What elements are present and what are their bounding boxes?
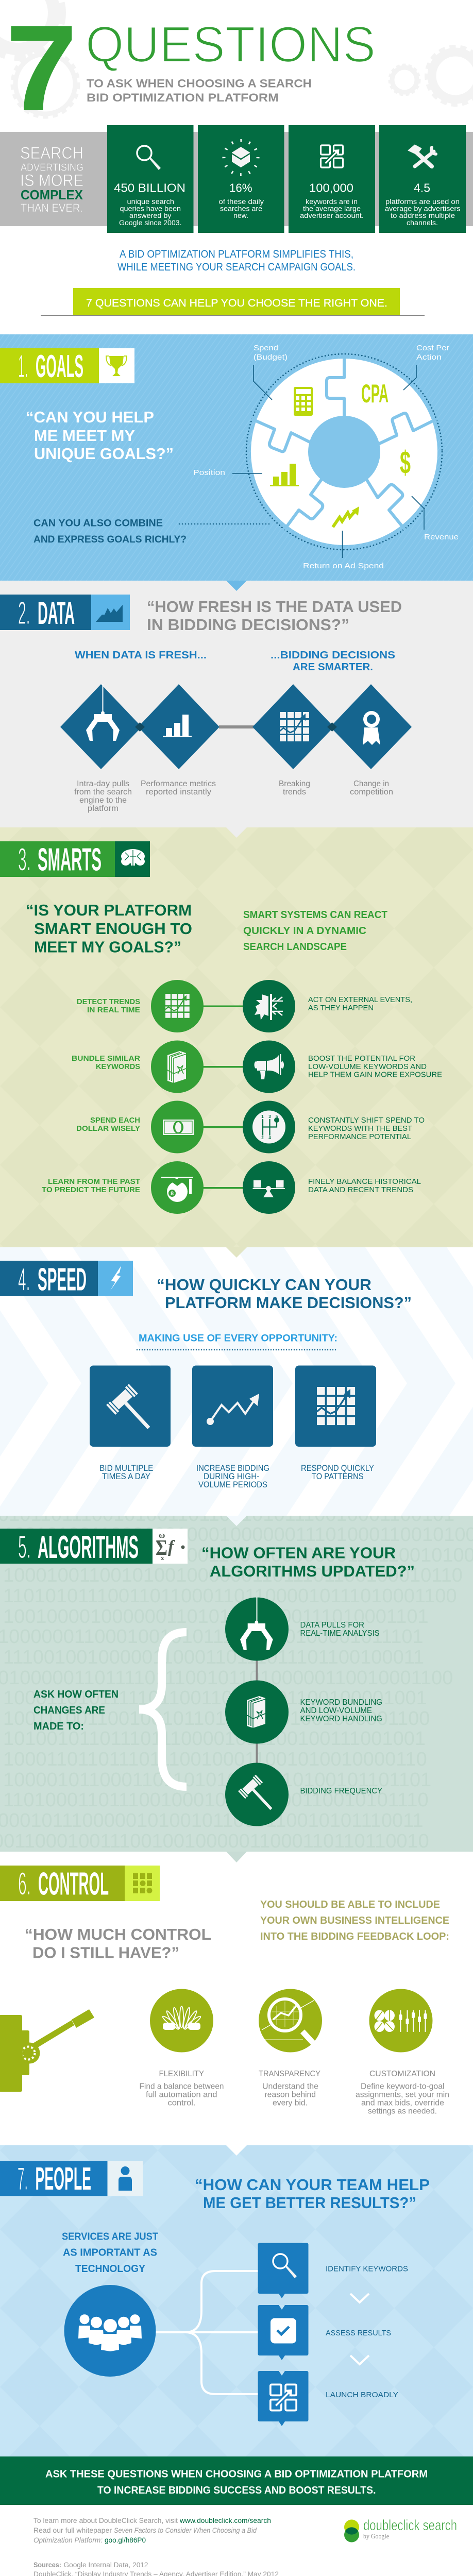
card: bid multiple xyxy=(90,1365,171,1447)
icon: money xyxy=(163,1120,194,1135)
left labels: SPEND EACH xyxy=(90,1116,140,1125)
left labels: DOLLAR WISELY xyxy=(76,1124,140,1133)
title: big numeral 7: 7 xyxy=(6,1,77,135)
icon: megaphone xyxy=(255,1054,284,1079)
captions: Change in xyxy=(353,779,389,788)
brace xyxy=(139,1632,187,1787)
heading: 5 algorithms: 5. xyxy=(18,1530,31,1565)
descriptions: reason behind xyxy=(265,2091,316,2099)
binary background: 1010010110111011100001011100100111001001 xyxy=(3,1728,426,1750)
text block: services xyxy=(62,2231,158,2275)
icon: gavel xyxy=(106,1384,160,1438)
text block: business intelligence xyxy=(260,1899,449,1942)
question: how can your team xyxy=(195,2176,430,2212)
stat card: 100,000: 100,000 xyxy=(309,181,353,195)
footer: links and sources: To learn more about DoubleClick Search, visit xyxy=(33,2517,178,2524)
footer: links and sources: Seven Factors to Consider When Choosing a Bid xyxy=(114,2527,257,2534)
text block: search advertising is more complex: SEARCH xyxy=(20,144,83,162)
stat card: 4.5: to address multiple xyxy=(391,212,455,219)
labels: Revenue xyxy=(424,533,459,541)
icon: gear shift: 1 xyxy=(261,1114,264,1119)
labels: LAUNCH BROADLY xyxy=(326,2391,398,2399)
text block: ask how often: ASK HOW OFTEN xyxy=(33,1689,119,1700)
binary background: 10010100110001001000100000011101000110010100 xyxy=(3,1524,473,1546)
chevrons xyxy=(350,2294,369,2364)
stat card: 4.5 xyxy=(379,125,466,233)
labels: Cost Per xyxy=(416,344,449,352)
binary background: 1000110101111101100110100101100100001001 xyxy=(3,1687,427,1709)
labels: KEYWORD HANDLING xyxy=(300,1715,382,1723)
labels: FLEXIBILITY xyxy=(159,2070,204,2078)
panel: 6 control xyxy=(0,1852,473,2145)
question: how fresh: “HOW FRESH IS THE DATA USED xyxy=(147,598,402,616)
icon: sigma formula: x xyxy=(161,1554,164,1562)
text block: smart systems: QUICKLY IN A DYNAMIC xyxy=(243,925,366,937)
icon: area chart xyxy=(96,605,123,622)
left labels: KEYWORDS xyxy=(96,1062,140,1071)
banner: 7 questions can help: 7 QUESTIONS CAN HELP YOU CHOOSE THE RIGHT ONE. xyxy=(86,297,387,309)
icon: magnifier xyxy=(137,146,161,170)
connectors xyxy=(256,1659,258,1764)
binary background: 01101001000100001001100110000000110110010100 xyxy=(3,1545,473,1566)
icon: slinky xyxy=(162,2006,201,2030)
text block: combine goals: AND EXPRESS GOALS RICHLY? xyxy=(33,534,187,545)
captions: DURING HIGH- xyxy=(204,1472,260,1481)
descriptions xyxy=(139,2082,449,2115)
binary background: 1001110011001001011010011001001000001100 xyxy=(3,1708,430,1730)
circle: keyword bundling xyxy=(225,1681,289,1743)
stat card: 16%: searches are xyxy=(220,205,262,212)
icon: rising arrow xyxy=(207,1394,259,1425)
icon: bundle xyxy=(166,1051,186,1083)
text block: smart systems: SMART SYSTEMS CAN REACT xyxy=(243,909,387,921)
connector xyxy=(219,725,255,728)
step: launch broadly xyxy=(258,2371,308,2426)
circle: customization xyxy=(369,1989,433,2053)
heading: 2 data: 2. xyxy=(18,596,30,631)
stat card: 450 billion: queries have been xyxy=(120,205,181,212)
connector lines xyxy=(155,2271,258,2394)
logo: doubleclick search: by Google xyxy=(363,2532,389,2540)
subtitle xyxy=(87,77,312,104)
right labels xyxy=(308,995,442,1194)
icon: gear shift xyxy=(252,1111,285,1144)
binary background: 0101101110010100110110010101110010001100101 xyxy=(0,1504,454,1526)
stat card: 16% xyxy=(198,125,284,233)
card: increase bidding xyxy=(192,1365,273,1447)
subtitle: TO ASK WHEN CHOOSING A SEARCH xyxy=(87,77,312,90)
binary background: 1110010010000011000110111011101100100011 xyxy=(3,1647,424,1668)
captions xyxy=(99,1464,374,1489)
binary background: 0001011100000101001011000110010101110011 xyxy=(0,1810,424,1832)
stat card: 450 billion: 450 BILLION xyxy=(114,181,185,195)
text block: search advertising is more complex: THAN EVER. xyxy=(21,201,83,214)
circle: flexibility xyxy=(150,1989,213,2053)
icon: gear shift: 3 xyxy=(268,1114,271,1119)
icon: cube xyxy=(224,141,258,175)
labels: TRANSPARENCY xyxy=(259,2070,320,2078)
step: assess results xyxy=(258,2305,308,2360)
diamonds xyxy=(60,684,412,769)
leader lines xyxy=(232,365,424,558)
icon: calculator xyxy=(294,387,313,416)
question: is your platform smart: MEET MY GOALS?” xyxy=(34,939,181,956)
descriptions: Define keyword-to-goal xyxy=(361,2082,444,2091)
icon: ribbon xyxy=(363,711,380,745)
labels: Return on Ad Spend xyxy=(303,562,384,570)
captions: platform xyxy=(88,804,119,813)
stat card: 450 billion xyxy=(107,125,194,233)
banner: closing: TO INCREASE BIDDING SUCCESS AND BOOST RESULTS. xyxy=(97,2485,376,2496)
stat card: 100,000: advertiser account. xyxy=(300,212,364,219)
text block: platform simplifies xyxy=(117,248,356,273)
icon: control grid xyxy=(133,1873,153,1893)
left labels xyxy=(42,997,140,1194)
title: QUESTIONS: QUESTIONS xyxy=(86,16,376,73)
question: is your platform smart xyxy=(26,902,192,956)
heading: 6 control: CONTROL xyxy=(38,1866,109,1902)
stat card: 4.5: channels. xyxy=(407,219,438,227)
question: how often xyxy=(201,1545,415,1580)
stat card: 450 billion: Google since 2003. xyxy=(119,219,181,227)
stat card: 16%: new. xyxy=(233,212,248,219)
icon: gear shift: 2 xyxy=(261,1136,264,1140)
heading: 7 people: 7. xyxy=(18,2161,28,2197)
footer: links and sources: www.doubleclick.com/search xyxy=(179,2517,271,2524)
panel: 3 smarts xyxy=(0,827,473,1247)
left labels: IN REAL TIME xyxy=(87,1006,140,1014)
binary background: 1000110110111011100100011001010010000110 xyxy=(3,1749,427,1770)
step: identify keywords xyxy=(258,2243,308,2298)
captions: competition xyxy=(350,788,393,796)
panel: 4 speed xyxy=(0,1247,473,1516)
footer: links and sources xyxy=(33,2517,279,2576)
question: how quickly xyxy=(157,1276,412,1312)
subtitle: BID OPTIMIZATION PLATFORM xyxy=(87,91,279,104)
descriptions: full automation and xyxy=(146,2091,217,2099)
labels xyxy=(326,2265,408,2399)
labels: BIDDING FREQUENCY xyxy=(300,1787,382,1795)
icon: gear shift: 4 xyxy=(268,1136,271,1140)
heading: 4 speed: SPEED xyxy=(38,1262,87,1297)
subheads: ...BIDDING DECISIONS xyxy=(271,650,395,661)
heading: 4 speed: 4. xyxy=(18,1262,30,1297)
question: can you help: ME MEET MY xyxy=(34,427,135,445)
icon: claw xyxy=(86,684,120,741)
text block: business intelligence: INTO THE BIDDING FEEDBACK LOOP: xyxy=(260,1931,449,1942)
icon: bars xyxy=(163,715,192,737)
text block: ask how often: CHANGES ARE xyxy=(33,1705,105,1716)
descriptions: every bid. xyxy=(273,2099,308,2107)
left labels: DETECT TRENDS xyxy=(77,997,140,1006)
labels: IDENTIFY KEYWORDS xyxy=(326,2265,408,2273)
icon: lightning bolt xyxy=(110,1266,121,1291)
binary background: 1101000110111001000101001000110010101110 xyxy=(3,1789,429,1811)
captions: Breaking xyxy=(279,779,310,788)
connectors xyxy=(201,1006,245,1189)
labels: REAL-TIME ANALYSIS xyxy=(300,1629,379,1638)
banner: closing: ASK THESE QUESTIONS WHEN CHOOSING A BID OPTIMIZATION PLATFORM xyxy=(45,2469,428,2480)
icon: sigma formula: ω xyxy=(159,1530,165,1540)
labels: Spend xyxy=(254,344,278,352)
stat card: 450 billion: unique search xyxy=(127,198,174,206)
text block: platform simplifies: A BID OPTIMIZATION PLATFORM SIMPLIFIES THIS, xyxy=(120,248,353,260)
icon: trophy xyxy=(106,356,127,376)
labels xyxy=(159,2070,435,2078)
icon: sigma formula: Σ xyxy=(156,1536,167,1560)
icon: trend grid xyxy=(165,994,190,1018)
labels: AND LOW-VOLUME xyxy=(300,1706,372,1715)
stat card: 16%: of these daily xyxy=(218,198,264,206)
right labels: CONSTANTLY SHIFT SPEND TO xyxy=(308,1116,425,1125)
labels: CUSTOMIZATION xyxy=(369,2070,435,2078)
footer: links and sources: goo.gl/h86P0 xyxy=(105,2536,146,2544)
captions: TIMES A DAY xyxy=(102,1472,150,1481)
descriptions: settings as needed. xyxy=(368,2107,437,2115)
question: how often: ALGORITHMS UPDATED?” xyxy=(210,1563,415,1580)
binary background: 1101010111001101100011011000010111010001100 xyxy=(3,1585,457,1607)
subhead: every opportunity: MAKING USE OF EVERY OPPORTUNITY: xyxy=(139,1333,337,1344)
chart: goal gear wheel xyxy=(179,344,459,570)
question: how can your team: “HOW CAN YOUR TEAM HELP xyxy=(195,2176,430,2194)
subheads: ARE SMARTER. xyxy=(293,662,373,673)
text block: business intelligence: YOU SHOULD BE ABLE TO INCLUDE xyxy=(260,1899,440,1910)
labels: Action xyxy=(416,353,442,362)
icon: gavel xyxy=(238,1775,280,1817)
panel: 7 people xyxy=(0,2145,473,2456)
icon: dollar: $ xyxy=(400,445,411,481)
captions: engine to the xyxy=(79,796,127,805)
captions: VOLUME PERIODS xyxy=(198,1480,267,1489)
question: is your platform smart: SMART ENOUGH TO xyxy=(34,920,192,938)
icon: person xyxy=(119,2166,132,2191)
binary background: 1000010110001101101010000010100101101101 xyxy=(3,1769,431,1791)
panel: 1 goals xyxy=(0,334,473,581)
text block: combine goals xyxy=(33,518,187,545)
icon: sliders and dials xyxy=(374,2010,427,2032)
subheads xyxy=(75,650,395,673)
icon: trend grid xyxy=(317,1387,355,1425)
stat card: 4.5: 4.5 xyxy=(414,181,430,195)
icon: gear shift: 5 xyxy=(276,1114,278,1119)
question: how much control: DO I STILL HAVE?” xyxy=(32,1944,179,1962)
stat card: 16%: 16% xyxy=(229,181,252,195)
text block: platform simplifies: WHILE MEETING YOUR SEARCH CAMPAIGN GOALS. xyxy=(117,261,356,273)
header: background gears xyxy=(0,0,473,117)
heading: 3 smarts: SMARTS xyxy=(38,842,102,878)
right labels: HELP THEM GAIN MORE EXPOSURE xyxy=(308,1071,442,1079)
text block: services: SERVICES ARE JUST xyxy=(62,2231,158,2242)
heading: 3 smarts xyxy=(0,841,150,878)
question: how quickly: PLATFORM MAKE DECISIONS?” xyxy=(165,1294,412,1312)
labels: (Budget) xyxy=(254,353,288,362)
text block: search advertising is more complex: IS MORE xyxy=(20,171,83,190)
icon: trend grid xyxy=(280,712,309,741)
icon: hammer and wrench xyxy=(408,145,436,166)
circles right xyxy=(243,980,295,1214)
left labels: BUNDLE SIMILAR xyxy=(72,1054,140,1063)
captions: BID MULTIPLE xyxy=(99,1464,154,1473)
text block: services: TECHNOLOGY xyxy=(75,2263,146,2275)
descriptions: control. xyxy=(168,2099,196,2107)
binary background: 1001000010000001101011011100111010001101 xyxy=(3,1606,429,1628)
descriptions: Understand the xyxy=(262,2082,318,2091)
panel: statistics band xyxy=(0,125,473,233)
question: how much control xyxy=(25,1926,211,1962)
icon: brain xyxy=(121,849,145,866)
right labels: AS THEY HAPPEN xyxy=(308,1004,374,1012)
stat card: 100,000 xyxy=(289,125,375,233)
labels: ASSESS RESULTS xyxy=(326,2329,391,2337)
left labels: TO PREDICT THE FUTURE xyxy=(42,1185,140,1194)
text block: services: AS IMPORTANT AS xyxy=(63,2247,157,2259)
circles left xyxy=(151,980,204,1214)
heading: 6 control xyxy=(0,1866,160,1902)
question: how quickly: “HOW QUICKLY CAN YOUR xyxy=(157,1276,371,1294)
heading: 1 goals: GOALS xyxy=(36,349,83,384)
labels: DATA PULLS FOR xyxy=(300,1621,364,1630)
icon: check xyxy=(271,2318,296,2343)
panel: 2 data xyxy=(0,581,473,827)
heading: 5 algorithms xyxy=(0,1529,188,1565)
captions xyxy=(74,779,393,813)
binary background: 1000000110001001010111101100100001011101 xyxy=(0,1626,424,1648)
descriptions: Find a balance between xyxy=(139,2082,224,2091)
stat card: 4.5: average by advertisers xyxy=(385,205,461,212)
captions: RESPOND QUICKLY xyxy=(301,1464,374,1473)
heading: 1 goals: 1. xyxy=(18,349,28,384)
heading: 1 goals xyxy=(0,348,134,384)
question: can you help: “CAN YOU HELP xyxy=(26,409,154,426)
stat card: 100,000: the average large xyxy=(303,205,361,212)
question: can you help: UNIQUE GOALS?” xyxy=(34,445,174,463)
captions: from the search xyxy=(74,788,132,796)
icon: people xyxy=(78,2314,142,2351)
footer: links and sources: Read our full whitepaper xyxy=(33,2527,112,2534)
icon: eight ball cap xyxy=(161,1177,193,1202)
captions: trends xyxy=(283,788,306,796)
captions: reported instantly xyxy=(146,788,211,796)
labels xyxy=(193,344,459,570)
labels xyxy=(300,1621,382,1795)
logo: doubleclick search xyxy=(344,2517,457,2542)
right labels: DATA AND RECENT TRENDS xyxy=(308,1185,413,1194)
circle: team xyxy=(64,2285,156,2377)
question: how fresh: IN BIDDING DECISIONS?” xyxy=(147,616,349,634)
right labels: LOW-VOLUME KEYWORDS AND xyxy=(308,1062,427,1071)
text block: smart systems xyxy=(243,909,387,953)
question: can you help xyxy=(26,409,174,463)
question: how fresh xyxy=(147,598,402,634)
panel: 5 algorithms xyxy=(0,1504,473,1852)
question: how much control: “HOW MUCH CONTROL xyxy=(25,1926,211,1943)
text block: ask how often: MADE TO: xyxy=(33,1721,84,1732)
text block: search advertising is more complex: ADVERTISING xyxy=(21,162,83,173)
captions: Performance metrics xyxy=(141,779,216,788)
icon: chart magnifier xyxy=(262,1999,315,2045)
text block: ask how often xyxy=(33,1689,119,1732)
binary background xyxy=(0,1504,473,1852)
question: is your platform smart: “IS YOUR PLATFORM xyxy=(26,902,192,919)
icon: bundle xyxy=(246,1696,265,1728)
subheads: WHEN DATA IS FRESH... xyxy=(75,650,207,661)
icon: bars xyxy=(270,464,299,486)
heading: 4 speed xyxy=(0,1261,133,1297)
captions: TO PATTERNS xyxy=(312,1472,364,1481)
right labels: FINELY BALANCE HISTORICAL xyxy=(308,1177,421,1186)
heading: 7 people xyxy=(0,2161,143,2197)
icon: sigma formula: f xyxy=(168,1537,176,1556)
binary background: 00110001001110010010000011000110110110010 xyxy=(0,1831,429,1852)
right labels: KEYWORDS WITH THE BEST xyxy=(308,1124,412,1133)
labels: Position xyxy=(193,468,225,477)
banner: 7 questions can help xyxy=(41,288,425,316)
circle: data pulls xyxy=(225,1597,289,1661)
footer: links and sources: Google Internal Data, 2012 xyxy=(64,2561,148,2569)
labels: KEYWORD BUNDLING xyxy=(300,1698,382,1707)
text block: business intelligence: YOUR OWN BUSINESS INTELLIGENCE xyxy=(260,1915,449,1926)
text block: combine goals: CAN YOU ALSO COMBINE xyxy=(33,518,163,529)
right labels: ACT ON EXTERNAL EVENTS, xyxy=(308,995,412,1004)
icon: balance xyxy=(252,1180,285,1197)
icon: expand arrows xyxy=(320,145,343,167)
icon: eight ball cap: 8 xyxy=(171,1191,174,1197)
card: respond quickly xyxy=(295,1365,376,1447)
descriptions: assignments, set your min xyxy=(356,2091,449,2099)
heading: 2 data: DATA xyxy=(38,596,75,631)
icon: growth arrow xyxy=(333,506,359,527)
icon: expand xyxy=(271,2384,296,2411)
icon: lever xyxy=(0,2009,94,2092)
binary background: 1000100110010100100000011011101100100010110 xyxy=(3,1565,463,1586)
heading: 2 data xyxy=(0,595,130,631)
text block: smart systems: SEARCH LANDSCAPE xyxy=(243,941,347,953)
stat card: 450 billion: answered by xyxy=(129,212,172,219)
text block: search advertising is more complex xyxy=(20,144,83,214)
heading: 3 smarts: 3. xyxy=(18,842,31,878)
left labels: LEARN FROM THE PAST xyxy=(48,1177,140,1186)
heading: 5 algorithms: ALGORITHMS xyxy=(38,1530,139,1565)
banner: closing xyxy=(0,2456,473,2505)
circle: transparency xyxy=(259,1989,322,2053)
question: how can your team: ME GET BETTER RESULTS?” xyxy=(203,2194,416,2212)
icon: CPA: CPA xyxy=(361,379,388,408)
descriptions: and max bids, override xyxy=(361,2099,444,2107)
heading: 7 people: PEOPLE xyxy=(35,2161,91,2197)
right labels: BOOST THE POTENTIAL FOR xyxy=(308,1054,415,1063)
heading: 6 control: 6. xyxy=(18,1866,31,1902)
text block: search advertising is more complex: COMPLEX xyxy=(21,187,83,202)
icon: magnifier xyxy=(273,2254,297,2278)
captions: INCREASE BIDDING xyxy=(196,1464,269,1473)
icon: claw xyxy=(240,1597,273,1650)
footer: links and sources: Sources: xyxy=(33,2561,61,2569)
stat card: 100,000: keywords are in xyxy=(306,198,358,206)
icon: sigma formula xyxy=(156,1530,184,1562)
question: how often: “HOW OFTEN ARE YOUR xyxy=(201,1545,396,1562)
circle: bidding frequency xyxy=(225,1763,289,1826)
right labels: PERFORMANCE POTENTIAL xyxy=(308,1132,411,1141)
binary background: 0100000110111101110010110100000110010001100 xyxy=(0,1667,453,1689)
captions: Intra-day pulls xyxy=(77,779,129,788)
stat card: 4.5: platforms are used on xyxy=(385,198,460,206)
footer: links and sources: Optimization Platform: xyxy=(33,2536,103,2544)
icon: sun and snowflake xyxy=(255,994,283,1020)
